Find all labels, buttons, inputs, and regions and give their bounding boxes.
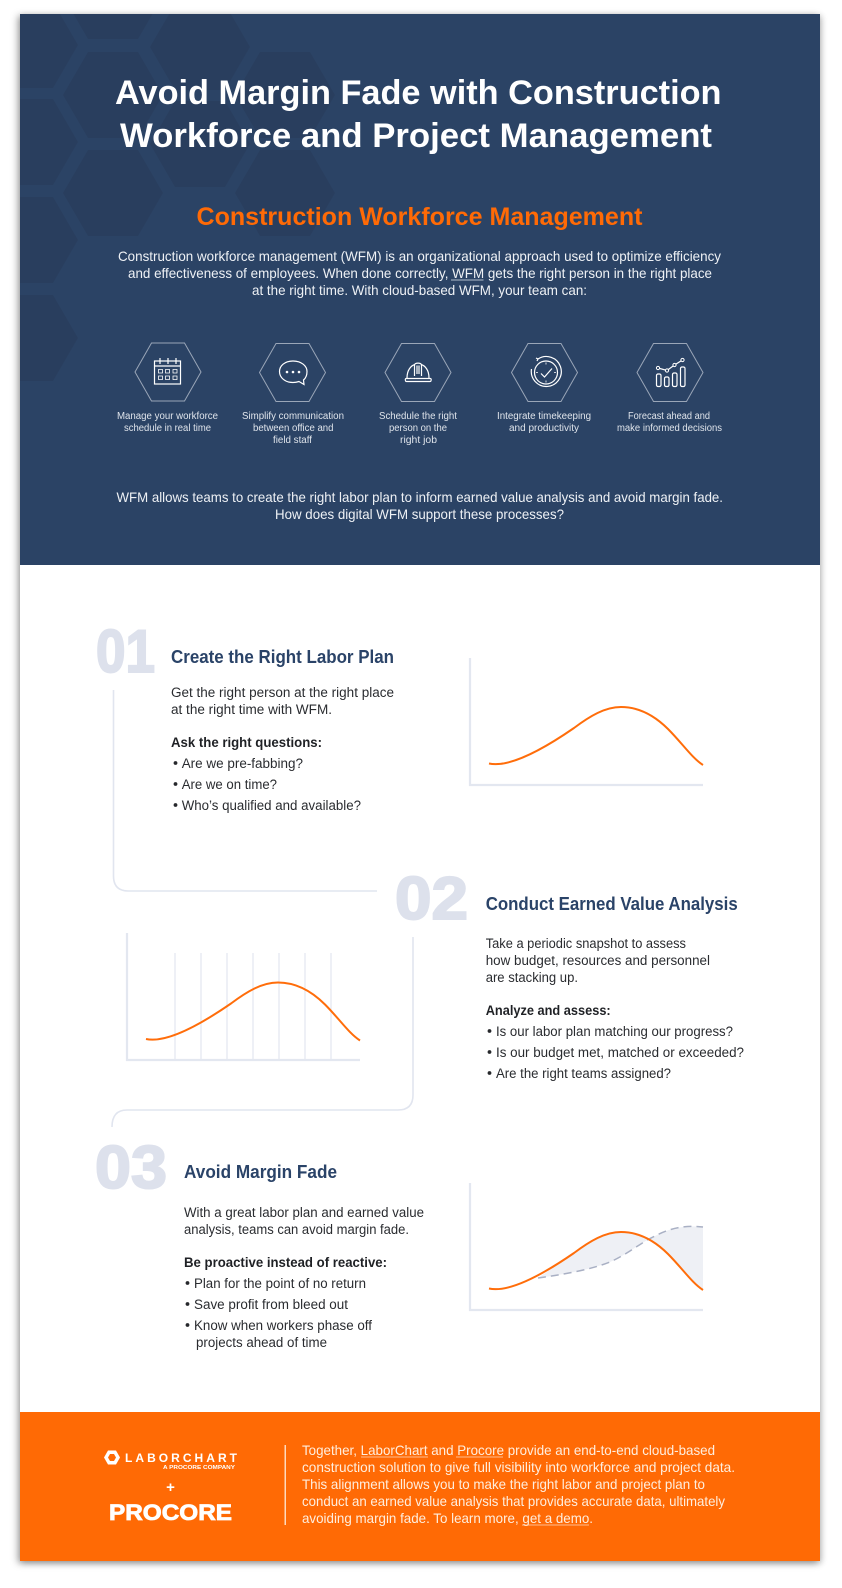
caption: forecast ahead: Forecast ahead and <box>628 411 710 422</box>
caption: integrate timekeeping: Integrate timekeeping <box>497 411 591 422</box>
analysis list: Are the right teams assigned? <box>496 1066 671 1081</box>
divider: footer vertical rule <box>284 1445 286 1525</box>
text block: WFM introduction: and effectiveness of employees. When done correctly, WFM gets the right person in the right place <box>128 265 712 281</box>
description: how budget, resources and personnel <box>486 953 710 968</box>
analysis list: Is our labor plan matching our progress? <box>496 1024 733 1039</box>
caption: schedule right person: Schedule the right <box>379 411 457 422</box>
description: Get the right person at the right place <box>171 685 394 700</box>
caption: simplify communication: field staff <box>273 435 312 446</box>
icon: hard hat in hexagon <box>385 344 451 402</box>
caption: manage schedule <box>117 411 218 434</box>
question list: Ask the right questions: <box>171 735 322 750</box>
description: at the right time with WFM. <box>171 702 332 717</box>
text block: footer summary: construction solution to give full visibility into workforce and project data. <box>302 1459 735 1475</box>
number: 03: 03 <box>95 1134 167 1201</box>
caption: simplify communication: between office and <box>253 423 334 434</box>
title: Avoid Margin Fade with Construction <box>115 74 722 112</box>
panel: header background <box>0 0 820 565</box>
caption: integrate timekeeping <box>497 411 591 434</box>
section 3 text <box>184 1162 424 1350</box>
text block: WFM introduction: Construction workforce management (WFM) is an organizational approach used to optimize efficiency <box>118 248 721 264</box>
connector: step 2 to step 3 <box>112 937 413 1127</box>
title: Workforce and Project Management <box>120 117 712 155</box>
proactive list <box>184 1255 387 1350</box>
logo: LaborChart: A PROCORE COMPANY <box>163 1465 236 1471</box>
text block: footer summary: avoiding margin fade. To learn more, get a demo. <box>302 1510 593 1526</box>
caption: manage schedule: schedule in real time <box>124 423 211 434</box>
chart: labor plan curve <box>470 658 703 785</box>
connector: step 1 to step 2 <box>114 690 377 891</box>
analysis list: Is our budget met, matched or exceeded? <box>496 1045 744 1060</box>
analysis list: Analyze and assess: <box>486 1003 611 1018</box>
heading: create the right labor plan: Create the Right Labor Plan <box>171 647 394 667</box>
logo: LaborChart: LABORCHART <box>125 1451 238 1465</box>
text block: footer summary: conduct an earned value analysis that provides accurate data, ultimately <box>302 1493 725 1509</box>
description: With a great labor plan and earned value <box>184 1205 424 1220</box>
caption: schedule right person: right job <box>400 435 437 446</box>
question list: Who’s qualified and available? <box>182 798 361 813</box>
panel: footer background <box>20 1412 820 1561</box>
question list <box>171 735 361 813</box>
icon: forecast bar chart in hexagon <box>637 344 703 402</box>
number: 02: 02 <box>395 865 468 932</box>
text block: footer summary: This alignment allows you to make the right labor and project plan to <box>302 1476 705 1492</box>
proactive list: Know when workers phase off <box>194 1318 372 1333</box>
proactive list: Plan for the point of no return <box>194 1276 366 1291</box>
analysis list <box>486 1003 744 1081</box>
description: analysis, teams can avoid margin fade. <box>184 1222 409 1237</box>
chart: earned value snapshot curve with gridlines <box>127 933 360 1060</box>
proactive list: Be proactive instead of reactive: <box>184 1255 387 1270</box>
description: Take a periodic snapshot to assess <box>486 936 686 951</box>
text block: closing question: How does digital WFM support these processes? <box>275 506 564 522</box>
caption: forecast ahead <box>617 411 722 434</box>
question list: Are we pre-fabbing? <box>182 756 303 771</box>
caption: simplify communication <box>242 411 344 446</box>
logo: LaborChart <box>104 1450 238 1471</box>
chart: margin fade gap between planned and actual curves <box>470 1183 703 1310</box>
caption: schedule right person: person on the <box>389 423 447 434</box>
description <box>184 1205 424 1237</box>
text block: closing question: WFM allows teams to create the right labor plan to inform earned value analysis and avoid margin fade. <box>116 489 723 505</box>
heading: avoid margin fade: Avoid Margin Fade <box>184 1162 337 1182</box>
caption: forecast ahead: make informed decisions <box>617 423 722 434</box>
text block: closing question <box>116 489 723 522</box>
text block: footer summary: Together, LaborChart and Procore provide an end-to-end cloud-based <box>302 1442 715 1458</box>
icon: clock with check in hexagon <box>512 344 578 402</box>
text block: WFM introduction: at the right time. With cloud-based WFM, your team can: <box>252 282 587 298</box>
question list: Are we on time? <box>182 777 277 792</box>
section 2 text <box>486 894 744 1081</box>
proactive list: Save profit from bleed out <box>194 1297 348 1312</box>
logo: Procore: PROCORE <box>109 1500 232 1525</box>
icon: calendar in hexagon <box>135 343 201 401</box>
number: 01: 01 <box>96 618 155 685</box>
text block: WFM introduction <box>118 248 721 298</box>
icon: speech bubble in hexagon <box>260 344 326 402</box>
text block: footer summary <box>302 1442 735 1526</box>
plus sign: + <box>166 1479 175 1496</box>
caption: integrate timekeeping: and productivity <box>509 423 579 434</box>
caption: manage schedule: Manage your workforce <box>117 411 218 422</box>
description: are stacking up. <box>486 970 578 985</box>
proactive list: projects ahead of time <box>196 1335 327 1350</box>
description <box>171 685 394 717</box>
heading: conduct earned value analysis: Conduct Earned Value Analysis <box>486 894 738 914</box>
title <box>115 74 722 155</box>
heading: construction workforce management: Construction Workforce Management <box>196 203 643 231</box>
description <box>486 936 710 985</box>
caption: schedule right person <box>379 411 457 446</box>
caption: simplify communication: Simplify communication <box>242 411 344 422</box>
section 1 text <box>171 647 394 813</box>
